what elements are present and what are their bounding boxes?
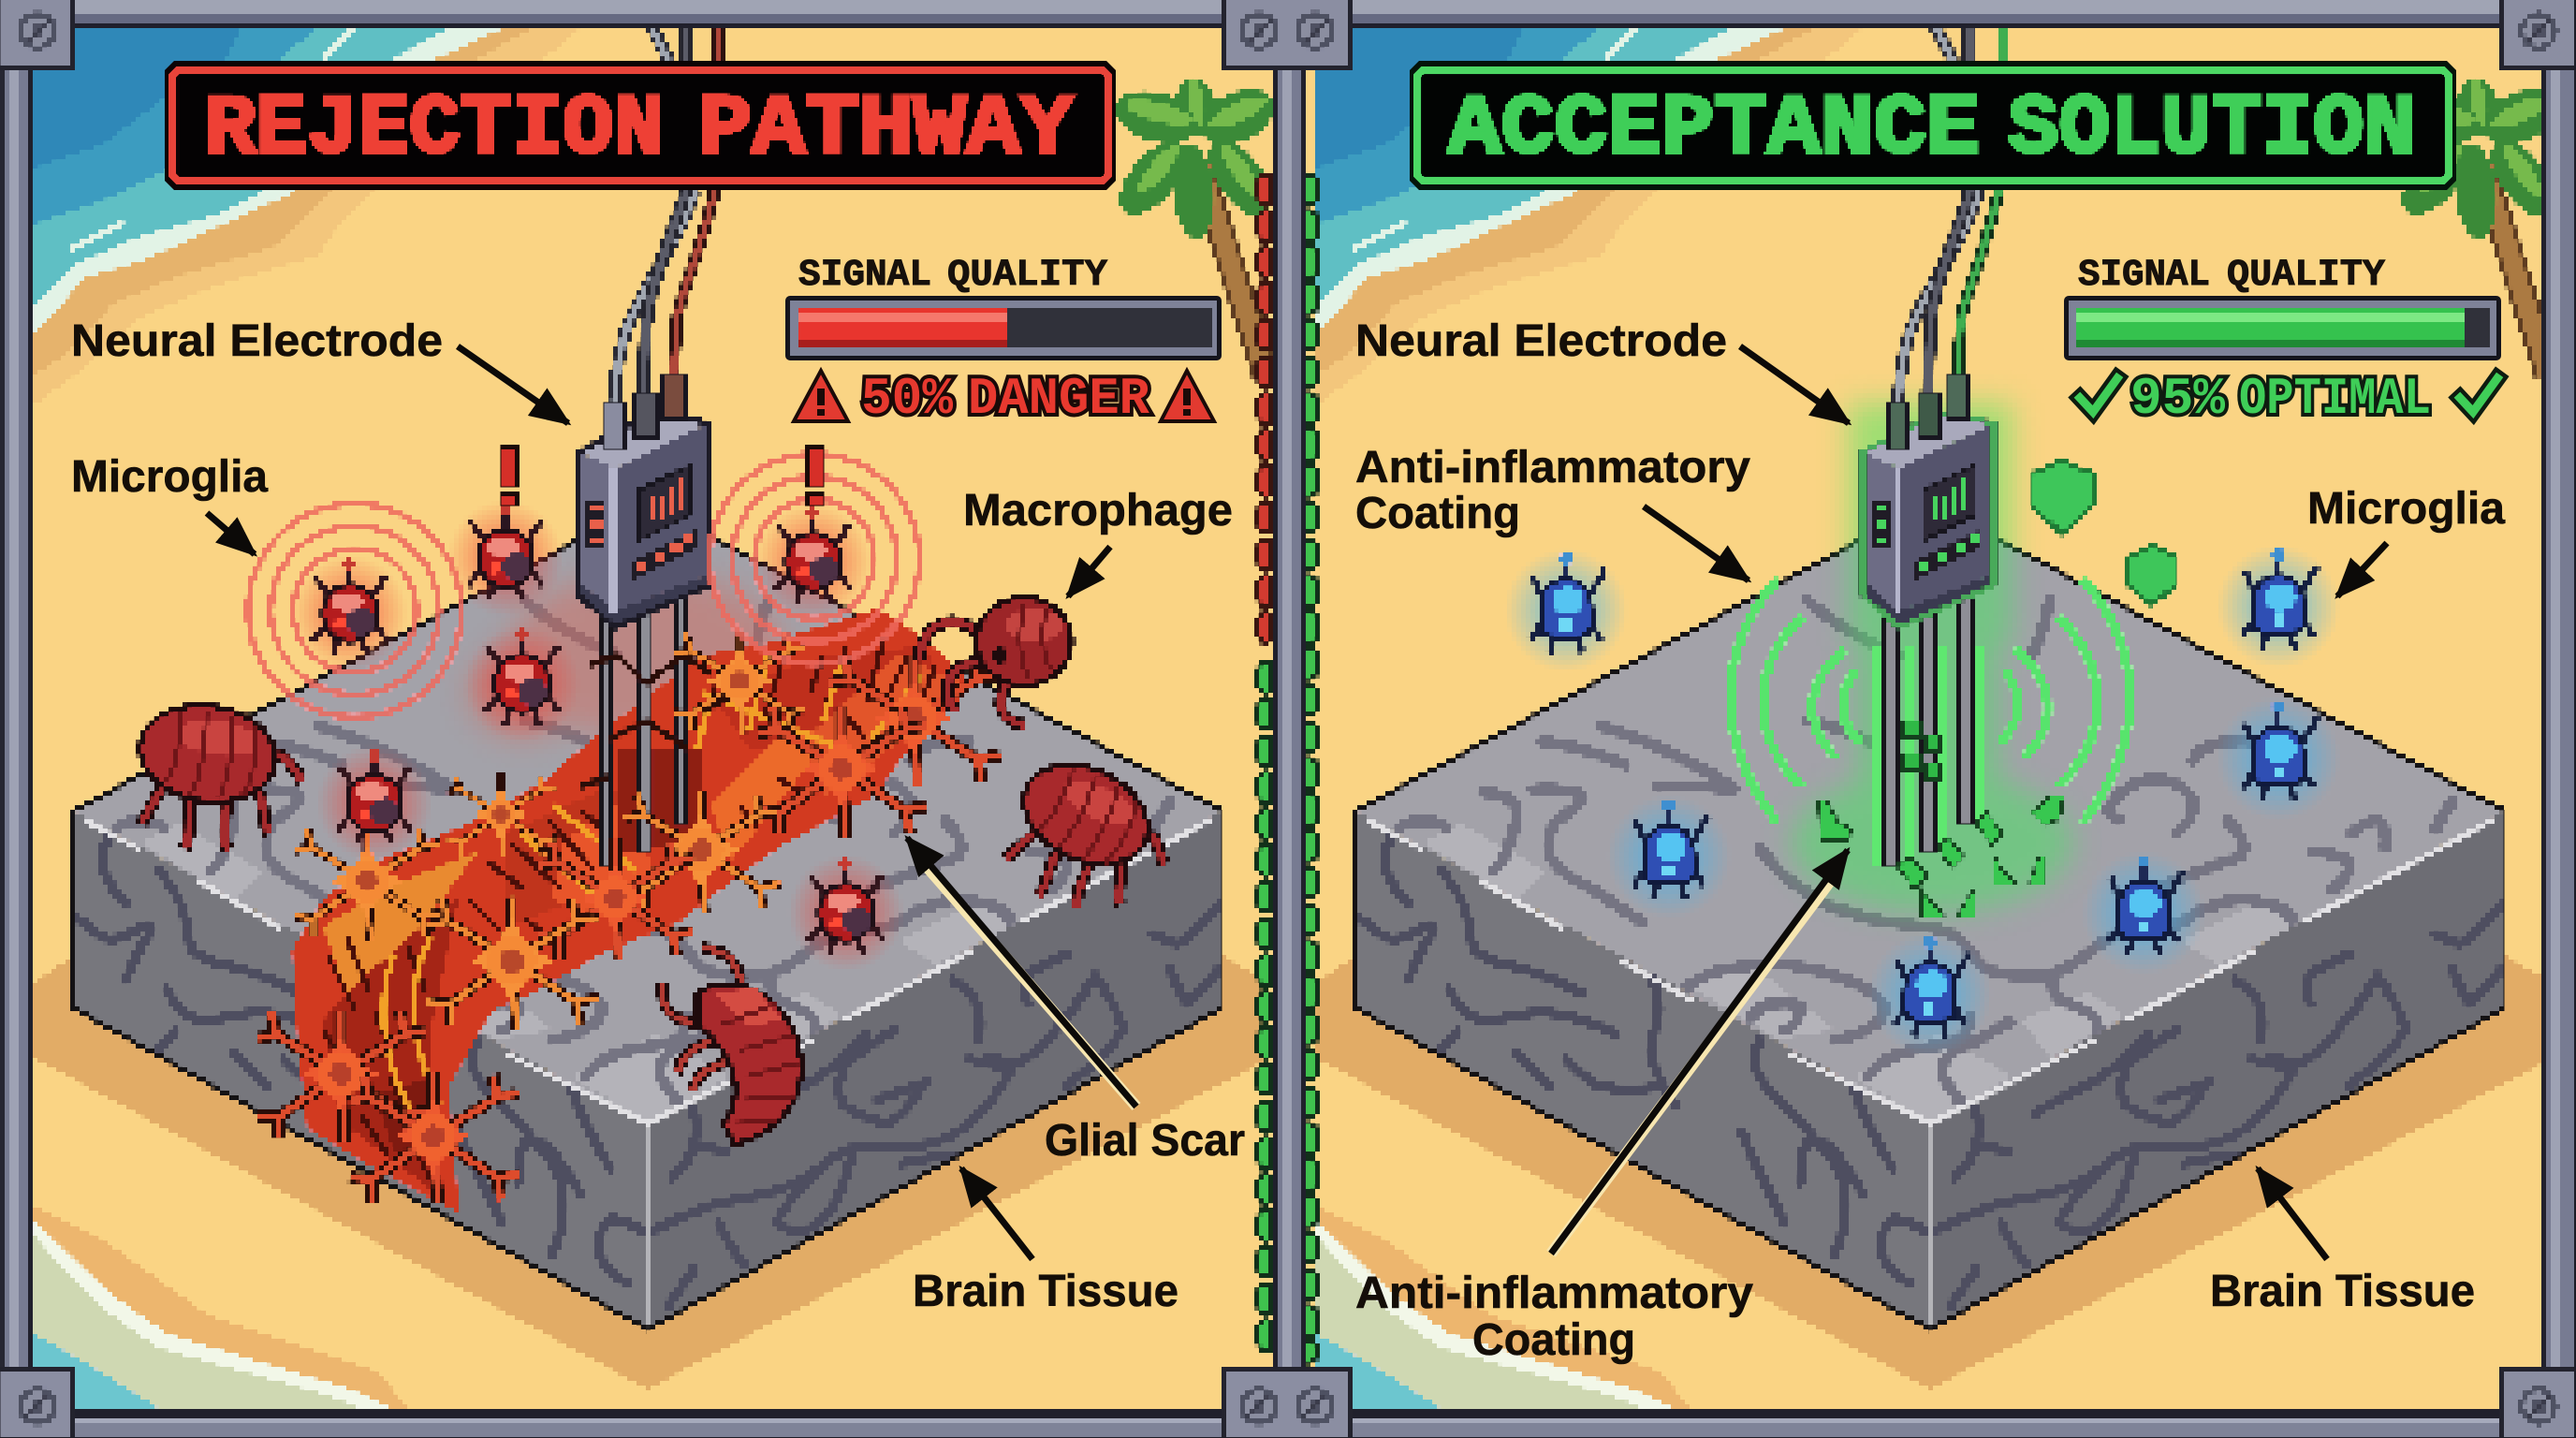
label: neural electrode: Neural Electrode [1355, 316, 1727, 366]
beach background [1282, 0, 2576, 1438]
device glowing outline [1863, 412, 1994, 627]
status word: danger: DANGER [968, 369, 1149, 429]
gauge fill: 50 percent [798, 308, 1007, 347]
icon: palm tree [1116, 79, 1273, 379]
title word: solution: SOLUTION [2008, 82, 2415, 178]
brain tissue block [74, 503, 1222, 1329]
green coating clump [1904, 721, 1941, 780]
macrophage: bottom crescent [663, 948, 801, 1144]
label: anti-inflammatory coating upper: Anti-inflammatory [1355, 443, 1750, 492]
wires: right [1898, 27, 2003, 413]
neural electrode device: left [578, 412, 710, 627]
label: coating lower second line: Coating [1472, 1315, 1635, 1365]
neural electrode device: right [1863, 412, 1994, 627]
coating wave arcs [1731, 582, 2130, 820]
scar texture [323, 637, 936, 1189]
beach background [0, 0, 1310, 1438]
icon: palm tree [2390, 75, 2567, 374]
wire connectors: right [1888, 374, 1969, 449]
alert marks [501, 448, 824, 506]
label: brain tissue: Brain Tissue [2210, 1267, 2475, 1316]
label: microglia: Microglia [71, 452, 268, 502]
wire connectors: left [604, 374, 685, 449]
arrows: acceptance panel [1551, 346, 2387, 1259]
gauge heading word: quality: QUALITY [947, 255, 1107, 297]
label: brain tissue: Brain Tissue [913, 1267, 1178, 1316]
icon: check marks [2080, 378, 2497, 412]
label: anti-inflammatory coating lower: Anti-inflammatory [1355, 1269, 1753, 1318]
astrocytes of glial scar [256, 631, 1000, 1205]
gauge heading word: signal: SIGNAL [2078, 255, 2210, 297]
glial scar [292, 609, 973, 1212]
electrode probes: right [1885, 580, 1971, 866]
inflammation haze [468, 571, 786, 740]
microglia: resting blue [1504, 545, 2340, 1056]
label: glial scar: Glial Scar [1045, 1116, 1245, 1166]
panel: rejection pathway scene [0, 0, 1310, 1438]
labels: acceptance panel [1355, 316, 2505, 1365]
title word: rejection: REJECTION [205, 82, 665, 178]
gauge fill: 95 percent [2076, 308, 2465, 347]
title banner: acceptance solution [1410, 61, 2456, 190]
icon: warning triangles [794, 371, 1214, 421]
title banner: rejection pathway [165, 61, 1116, 190]
label: microglia: Microglia [2307, 484, 2505, 534]
signal rings around microglia [248, 454, 919, 717]
gauge heading word: quality: QUALITY [2227, 255, 2385, 297]
macrophage: upper left [124, 694, 312, 865]
macrophage: lower right [985, 742, 1191, 939]
status word: optimal: OPTIMAL [2239, 369, 2431, 429]
status value: 95%: 95% [2130, 369, 2225, 429]
center vines [1266, 181, 1310, 1356]
scar tendrils over probes [580, 655, 739, 786]
wires: left [614, 27, 719, 413]
label: neural electrode: Neural Electrode [71, 316, 443, 366]
brain tissue block [1356, 503, 2504, 1329]
signal quality gauge: left [785, 255, 1222, 429]
microglia: activated red [292, 500, 904, 971]
title word: acceptance: ACCEPTANCE [1448, 82, 1980, 178]
shields [2031, 461, 2176, 605]
gauge heading word: signal: SIGNAL [798, 255, 931, 297]
green coating on probes [1875, 646, 1981, 866]
signal quality gauge: right [2064, 255, 2501, 429]
labels: rejection panel [71, 316, 1245, 1316]
electrode probes: left [601, 580, 687, 866]
green coating glow [1792, 403, 2072, 913]
macrophages [124, 594, 1191, 1144]
panel: acceptance solution scene [1282, 0, 2576, 1438]
macrophage: upper right [919, 594, 1075, 726]
label: macrophage: Macrophage [963, 486, 1233, 536]
arrows: rejection panel [207, 346, 1136, 1259]
status value: 50%: 50% [861, 369, 953, 429]
title word: pathway: PATHWAY [698, 82, 1074, 178]
coating fragments [1819, 796, 2064, 917]
label: coating upper second line: Coating [1355, 489, 1520, 538]
